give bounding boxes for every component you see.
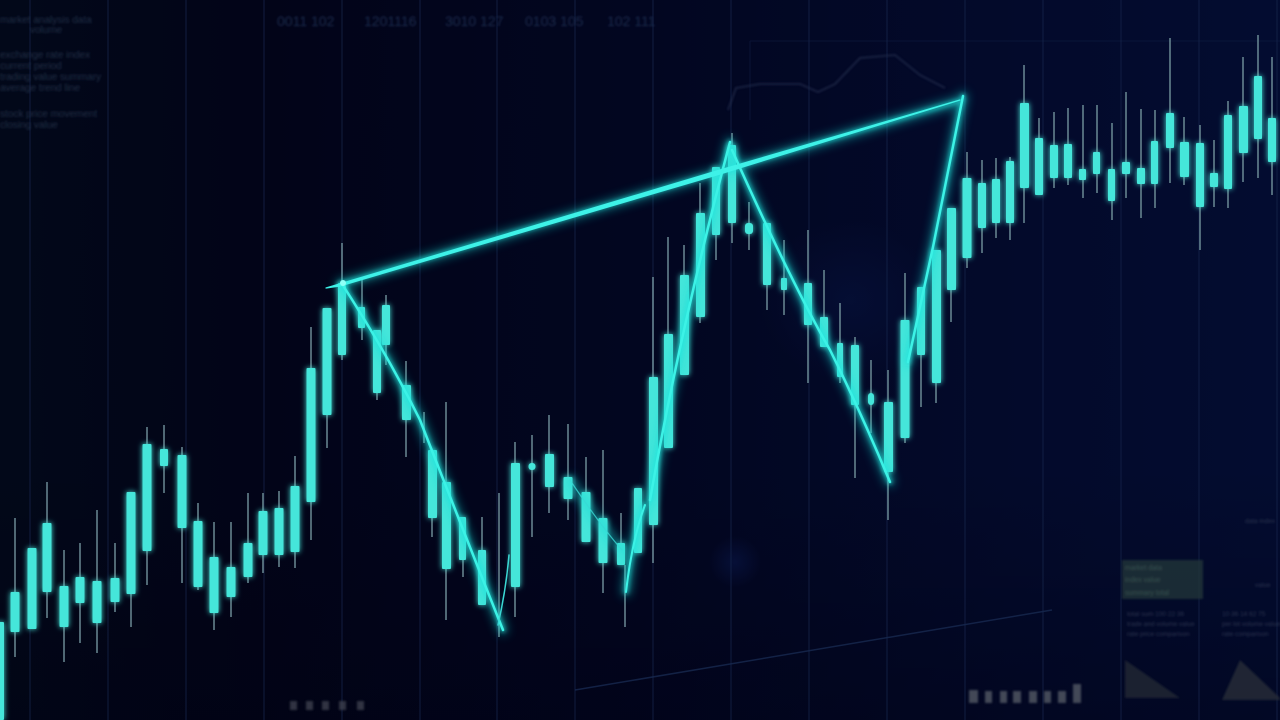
data panel: market data — [1125, 565, 1162, 572]
ascending leg to middle peak — [650, 142, 730, 500]
flare at first top — [340, 280, 346, 286]
recovery leg — [626, 505, 645, 592]
caption text — [1127, 518, 1280, 638]
caption text: total sum 100 22 36 — [1127, 611, 1184, 618]
side notes: average trend line — [0, 83, 80, 94]
triangle chart right — [1222, 660, 1280, 700]
triangle chart left — [1125, 660, 1180, 698]
second top and decline candles — [728, 145, 893, 472]
middle recovery candles — [528, 167, 720, 565]
faint background curve — [728, 55, 945, 110]
right consolidation candles — [978, 76, 1276, 228]
descending leg one — [342, 284, 503, 630]
mini bars bottom right — [969, 684, 1081, 703]
first top and decline candles — [338, 283, 520, 605]
side notes: exchange rate index — [0, 50, 90, 61]
data panel: index value — [1125, 577, 1161, 584]
side notes: current period — [0, 61, 62, 72]
data panel — [1122, 560, 1203, 599]
side notes: market analysis data — [0, 15, 92, 26]
breakout candles — [900, 178, 972, 438]
faint ascending line at bottom — [575, 610, 1052, 690]
thin recovery curve — [570, 480, 622, 550]
glowing pattern lines — [326, 96, 963, 630]
caption text: 10 36 14 62 75 — [1222, 611, 1266, 618]
caption text: rate price comparison — [1127, 631, 1190, 638]
caption text: data index — [1245, 518, 1276, 525]
descending leg two — [732, 150, 890, 482]
header labels: 0103 105 — [525, 13, 584, 29]
header labels: 102 111 — [607, 13, 656, 29]
rebound spike — [498, 555, 509, 625]
mini bars bottom centre — [290, 701, 364, 710]
ascending leg to breakout — [908, 96, 963, 362]
left rally candles — [0, 308, 332, 720]
side notes: volume — [30, 25, 63, 36]
side notes: trading value summary — [0, 72, 101, 83]
side notes: stock price movement — [0, 109, 97, 120]
wide line glow halo — [340, 96, 963, 630]
bottom right panels — [1122, 518, 1280, 700]
header labels — [277, 13, 656, 29]
header labels: 3010 127 — [445, 13, 504, 29]
side notes: closing value — [0, 120, 58, 131]
caption text: rate comparison — [1222, 631, 1269, 638]
header labels: 0011 102 — [277, 13, 335, 29]
header labels: 1201116 — [364, 13, 417, 29]
data panel: summary total — [1125, 590, 1169, 597]
caption text: value — [1255, 582, 1271, 589]
neckline — [326, 100, 960, 288]
side notes — [0, 15, 101, 131]
tight line glow halo — [340, 96, 963, 630]
caption text: trade and volume value — [1127, 621, 1195, 628]
